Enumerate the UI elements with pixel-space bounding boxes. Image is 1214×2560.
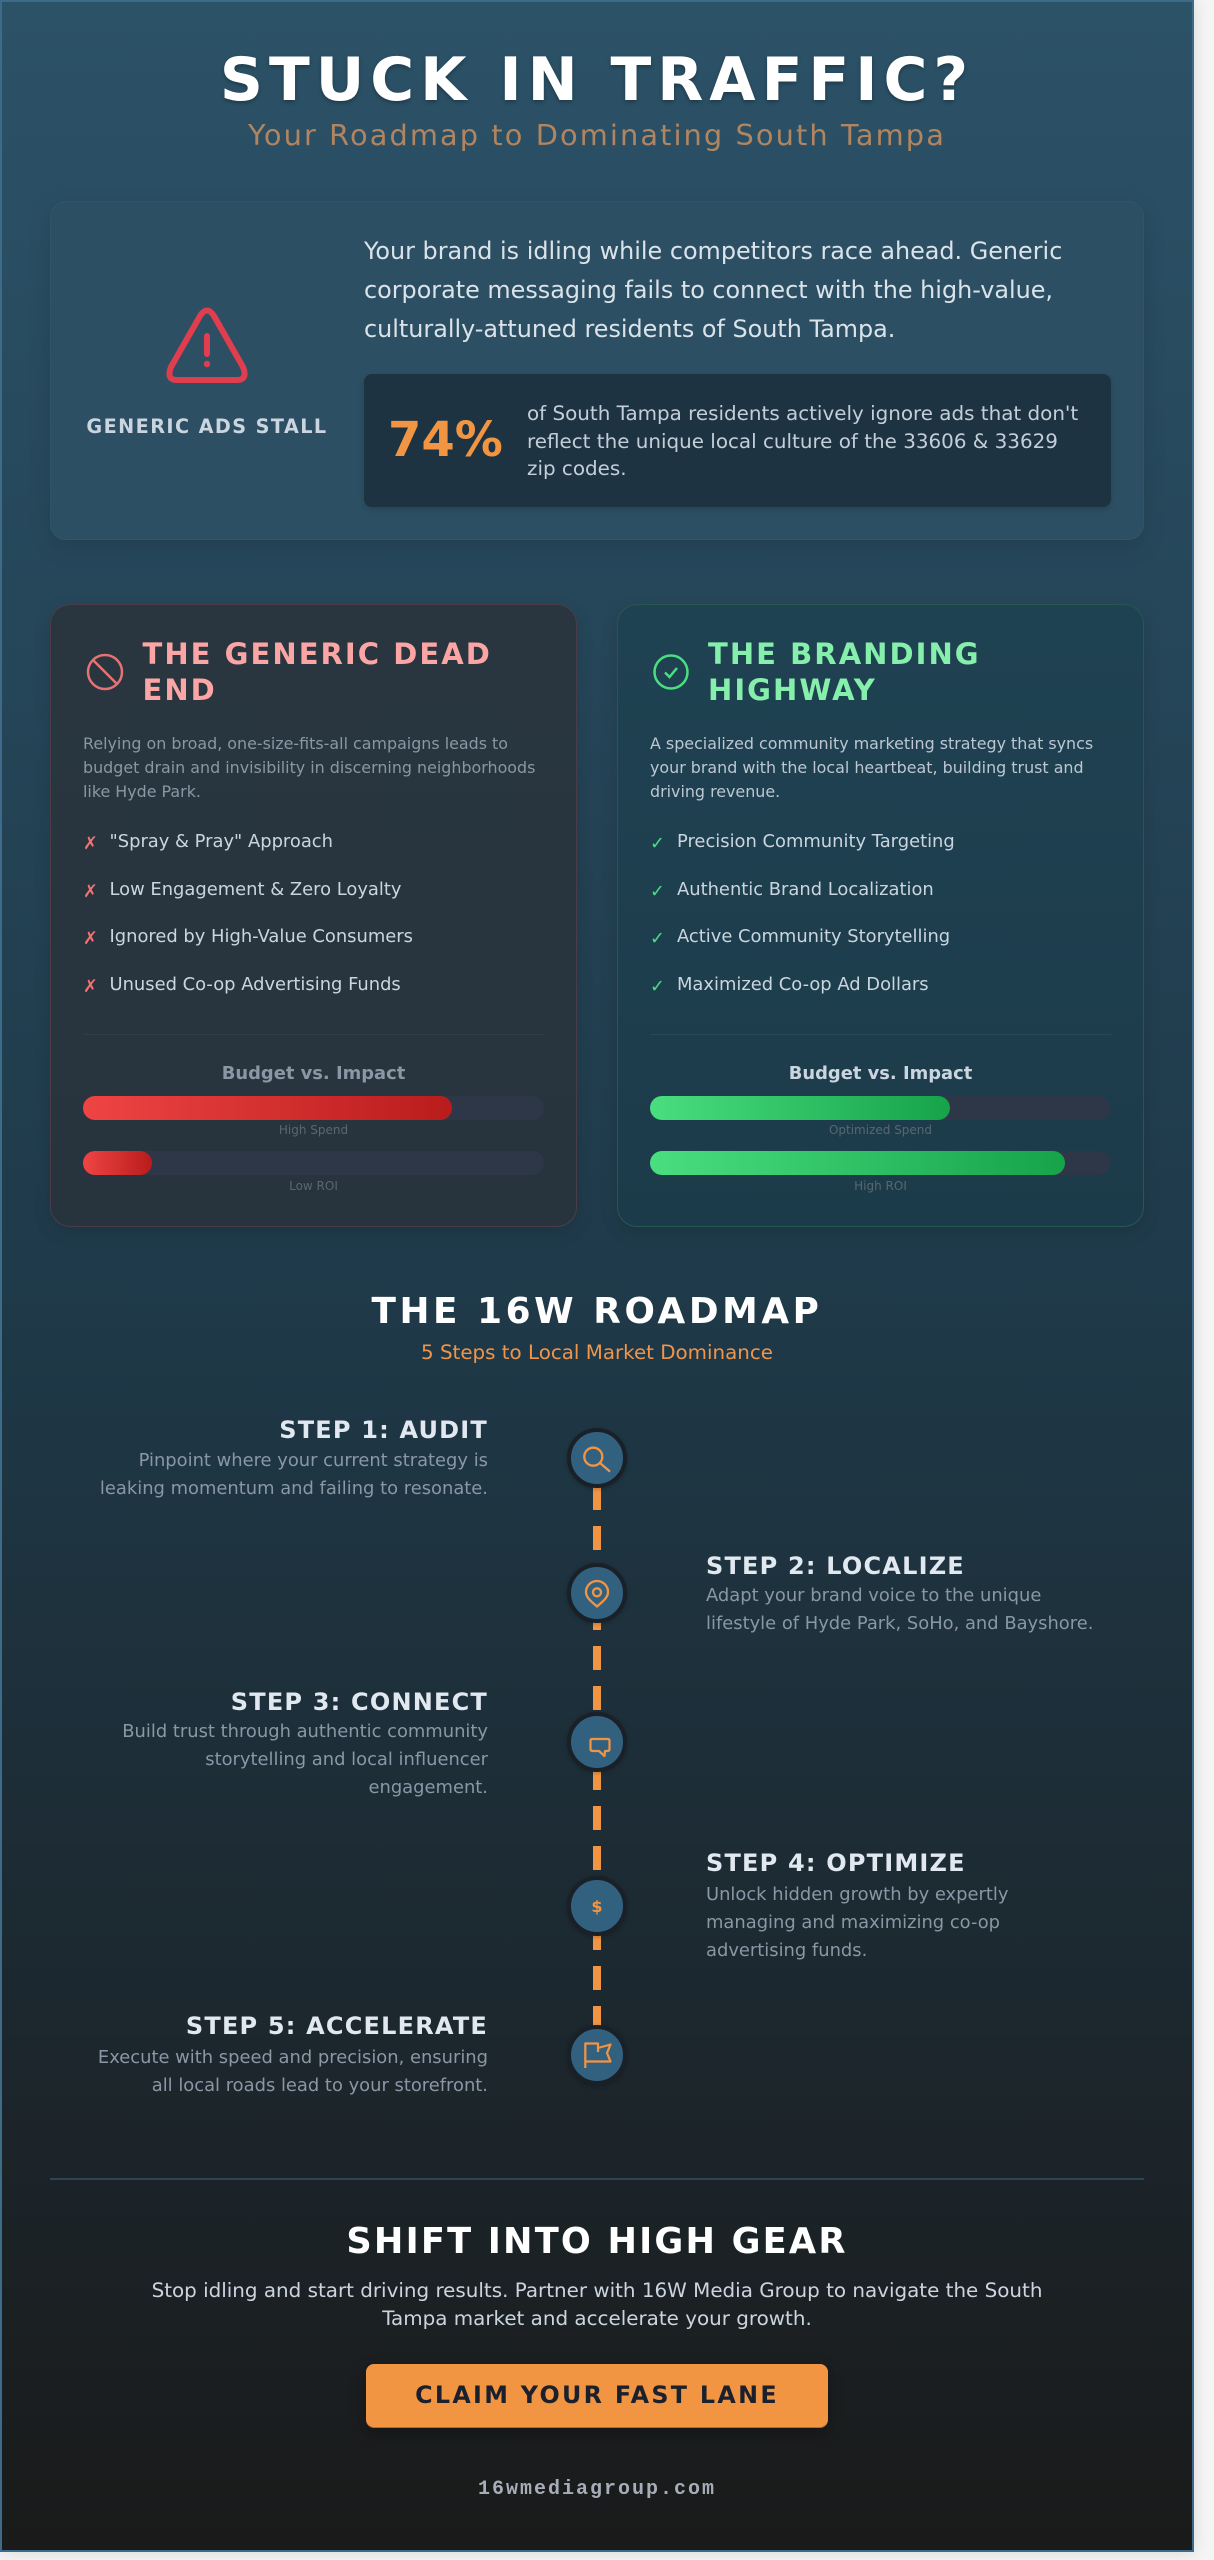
step 1 <box>100 1416 488 1499</box>
step 5 title: STEP 5: ACCELERATE <box>186 2012 488 2040</box>
description: highway: your brand with the local heartbeat, building trust and <box>650 758 1084 777</box>
list: dead end: Ignored by High-Value Consumers <box>110 926 413 946</box>
step 1 text: leaking momentum and failing to resonate. <box>100 1478 488 1499</box>
list: highway: Authentic Brand Localization <box>677 878 934 900</box>
step 4 text <box>706 1884 1008 1960</box>
list: highway <box>650 830 955 997</box>
item: ✓ <box>650 834 665 854</box>
description: dead end: budget drain and invisibility in discerning neighborhoods <box>83 758 535 777</box>
chart title: dead end: Budget vs. Impact <box>222 1063 405 1084</box>
description: dead end: Relying on broad, one-size-fits-all campaigns leads to <box>83 734 508 753</box>
panel: branding highway <box>617 604 1144 1227</box>
list: dead end: Low Engagement & Zero Loyalty <box>110 878 401 900</box>
list: dead end: "Spray & Pray" Approach <box>110 830 333 852</box>
panel: hero problem <box>50 201 1144 540</box>
bar label: Low ROI <box>289 1179 338 1193</box>
chart title: highway: Budget vs. Impact <box>789 1063 972 1084</box>
step 5 <box>98 2012 488 2096</box>
panel: generic dead end <box>50 604 577 1227</box>
step 4 text: Unlock hidden growth by expertly <box>706 1884 1008 1904</box>
description: dead end <box>83 734 535 801</box>
step 5 text: Execute with speed and precision, ensuring <box>98 2046 488 2068</box>
step 3 <box>122 1688 488 1798</box>
icon: warning triangle <box>166 308 248 383</box>
bar: low ROI <box>83 1151 544 1175</box>
bar: optimized spend <box>650 1096 1111 1120</box>
item: ✗ <box>83 834 98 854</box>
stat text: of South Tampa residents actively ignore ads that don't <box>527 402 1078 425</box>
list: highway: ✓ <box>650 977 665 997</box>
section heading: roadmap: THE 16W ROADMAP <box>371 1290 823 1332</box>
CTA text: Tampa market and accelerate your growth. <box>382 2307 812 2330</box>
heading: highway <box>708 637 981 706</box>
stat text: zip codes. <box>527 457 627 480</box>
icon: check circle <box>653 654 689 690</box>
description: highway: A specialized community marketing strategy that syncs <box>650 734 1093 753</box>
CTA heading: SHIFT INTO HIGH GEAR <box>346 2220 848 2262</box>
step 2 title: STEP 2: LOCALIZE <box>706 1552 965 1580</box>
step 3 text <box>122 1720 488 1798</box>
list: highway: ✓ <box>650 929 665 949</box>
subtitle: Your Roadmap to Dominating South Tampa <box>248 118 946 152</box>
list: dead end: Unused Co-op Advertising Funds <box>110 974 401 994</box>
hero body text: culturally-attuned residents of South Tampa. <box>364 315 895 343</box>
section subheading: 5 Steps to Local Market Dominance <box>421 1341 773 1364</box>
list: dead end: ✗ <box>83 929 98 949</box>
icon: search node <box>567 1428 627 1488</box>
step 3 text: engagement. <box>368 1776 488 1798</box>
step 3 text: Build trust through authentic community <box>122 1720 488 1742</box>
bar label: High ROI <box>854 1179 907 1193</box>
stat box <box>364 374 1111 507</box>
CTA text: Stop idling and start driving results. Partner with 16W Media Group to navigate the South <box>152 2279 1042 2302</box>
list: highway: ✓ <box>650 882 665 902</box>
website url: 16wmediagroup.com <box>478 2478 716 2500</box>
hero body text: corporate messaging fails to connect with the high-value, <box>364 276 1053 304</box>
heading: dead end: THE GENERIC DEAD <box>142 637 492 671</box>
CTA text <box>152 2279 1042 2330</box>
step 4 text: managing and maximizing co-op <box>706 1912 1000 1932</box>
heading: highway: HIGHWAY <box>708 672 877 706</box>
step 3 text: storytelling and local influencer <box>205 1748 488 1770</box>
icon: dollar node: $ <box>591 1897 603 1916</box>
step 4 <box>706 1849 1008 1960</box>
bar label: High Spend <box>279 1123 348 1137</box>
stat text: reflect the unique local culture of the 33606 & 33629 <box>527 430 1058 453</box>
description: highway: driving revenue. <box>650 782 780 801</box>
hero body text <box>364 237 1062 343</box>
icon: prohibited <box>86 654 124 690</box>
step 2 text <box>706 1585 1093 1634</box>
description: dead end: like Hyde Park. <box>83 782 201 801</box>
CTA button <box>366 2364 828 2427</box>
step 5 text <box>98 2046 488 2096</box>
step 4 text: advertising funds. <box>706 1940 867 1960</box>
list: dead end: ✗ <box>83 977 98 997</box>
heading: dead end: END <box>142 672 217 706</box>
step 5 text: all local roads lead to your storefront. <box>152 2074 488 2096</box>
hero icon label: GENERIC ADS STALL <box>86 415 328 438</box>
list: dead end: ✗ <box>83 882 98 902</box>
description: highway <box>650 734 1093 801</box>
list: highway: Maximized Co-op Ad Dollars <box>677 974 929 994</box>
stat number: 74% <box>388 412 503 468</box>
step 1 title: STEP 1: AUDIT <box>279 1416 488 1444</box>
step 3 title: STEP 3: CONNECT <box>231 1688 488 1716</box>
step 1 text: Pinpoint where your current strategy is <box>139 1450 488 1471</box>
icon: chat node <box>567 1712 627 1772</box>
step 4 title: STEP 4: OPTIMIZE <box>706 1849 966 1877</box>
step 1 text <box>100 1450 488 1499</box>
bar: high ROI <box>650 1151 1111 1175</box>
list: highway: Precision Community Targeting <box>677 830 955 852</box>
timeline dashed road <box>593 1446 601 2046</box>
bar label: Optimized Spend <box>829 1123 932 1137</box>
heading: dead end <box>142 637 492 706</box>
hero body text: Your brand is idling while competitors race ahead. Generic <box>364 237 1062 265</box>
bar: high spend <box>83 1096 544 1120</box>
icon: pin node <box>567 1563 627 1623</box>
title: STUCK IN TRAFFIC? <box>220 45 974 115</box>
step 2 text: lifestyle of Hyde Park, SoHo, and Bayshore. <box>706 1613 1093 1634</box>
icon: flag node <box>567 2025 627 2085</box>
list: dead end <box>83 830 413 997</box>
step 2 <box>706 1552 1093 1634</box>
CTA button: CLAIM YOUR FAST LANE <box>415 2381 779 2409</box>
stat text <box>527 402 1078 480</box>
icon: dollar node <box>567 1876 627 1936</box>
list: highway: Active Community Storytelling <box>677 926 950 946</box>
step 2 text: Adapt your brand voice to the unique <box>706 1585 1041 1606</box>
heading: highway: THE BRANDING <box>708 637 981 671</box>
